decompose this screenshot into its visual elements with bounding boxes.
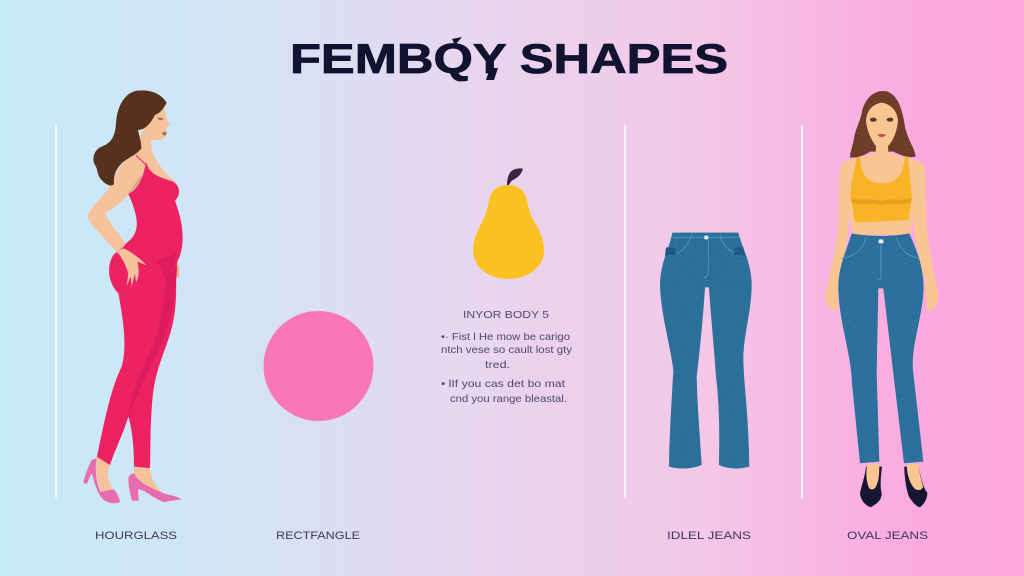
- hourglass strap: [136, 155, 147, 166]
- hourglass jumpsuit shading: [128, 248, 177, 417]
- hourglass right foot: [134, 467, 163, 493]
- oval right shoe: [904, 467, 927, 507]
- text block: body notes: [441, 309, 573, 405]
- oval right foot: [907, 464, 923, 490]
- icon: pear: [473, 168, 544, 279]
- first note: ntch vese so cault lost gty: [441, 344, 573, 356]
- oval hair: [850, 91, 916, 158]
- hourglass armpit shadow: [128, 177, 143, 194]
- oval jeans stitching: [842, 237, 919, 279]
- oval top: [851, 157, 912, 223]
- jeans illustration: [660, 233, 752, 468]
- hourglass left foot: [96, 457, 113, 493]
- oval left foot: [866, 464, 879, 489]
- oval face details: [870, 118, 893, 137]
- oval button: [879, 239, 883, 243]
- jeans button: [704, 236, 708, 239]
- oval top shading: [851, 197, 911, 205]
- label: oval jeans: OVAL JEANS: [847, 530, 928, 542]
- oval left shoe: [860, 467, 882, 507]
- hourglass hand over hip: [117, 248, 147, 287]
- hourglass jumpsuit: [97, 162, 183, 468]
- label: rectangle: RECTFANGLE: [276, 530, 360, 542]
- second note: cnd you range bleastal.: [450, 393, 567, 405]
- oval left arm: [825, 164, 852, 312]
- first note: [441, 331, 573, 371]
- title: FEMBQY SHAPES: [290, 35, 728, 82]
- icon: pink circle: [264, 311, 374, 421]
- label: idlel jeans: IDLEL JEANS: [667, 530, 751, 542]
- oval jeans: [838, 233, 924, 463]
- note heading: INYOR BODY 5: [463, 309, 549, 321]
- figure: oval woman in yellow top and jeans: [825, 91, 938, 507]
- oval skin: head, neck, shoulders: [841, 103, 924, 235]
- jeans pocket shadow: [665, 247, 745, 256]
- first note: •· Fist l He mow be carigo: [441, 331, 570, 343]
- hourglass front hand: [173, 263, 179, 278]
- hourglass left shoe: [83, 458, 120, 503]
- figure: hourglass woman in pink jumpsuit: [83, 90, 183, 503]
- second note: [441, 378, 567, 405]
- hourglass rear arm: [88, 155, 147, 252]
- hourglass face details: [157, 117, 167, 135]
- oval right arm: [911, 164, 938, 312]
- jeans body: [660, 233, 752, 468]
- label: hourglass: HOURGLASS: [95, 530, 177, 542]
- second note: • lIf you cas det bo mat: [441, 378, 565, 390]
- first note: tred.: [485, 359, 510, 371]
- hourglass hair: [93, 90, 167, 185]
- jeans stitching and pockets: [667, 234, 744, 278]
- hourglass right shoe: [128, 473, 182, 502]
- hourglass skin: head, neck, chest: [132, 103, 175, 190]
